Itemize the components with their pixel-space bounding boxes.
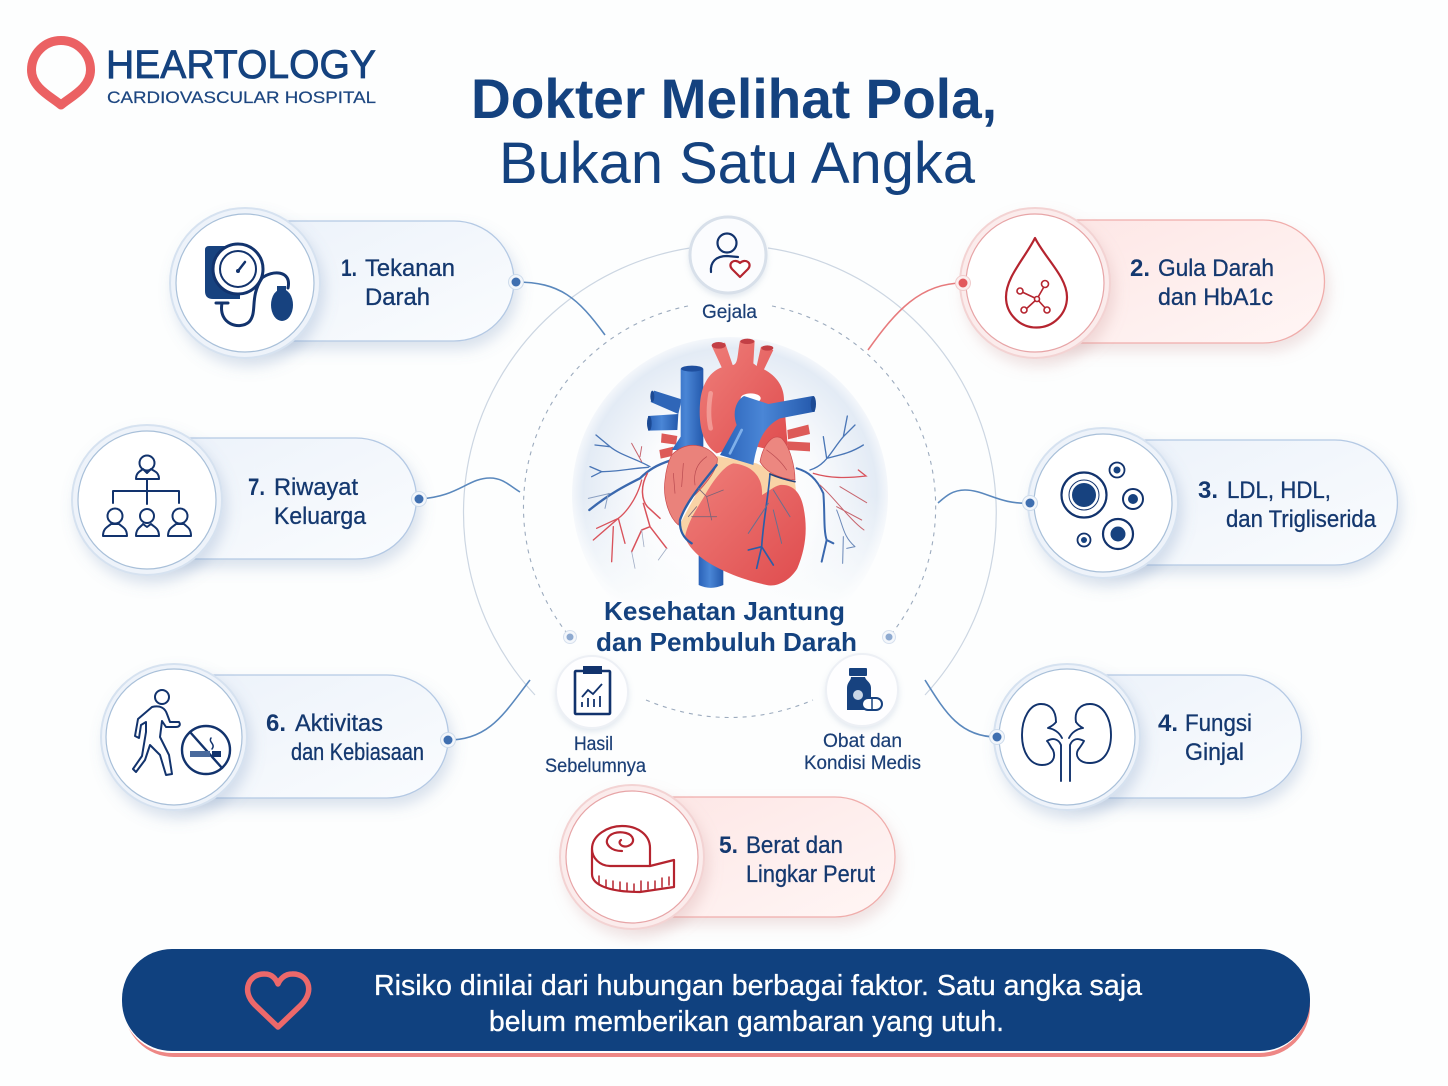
circle [72,425,222,575]
panel: 4 Fungsi Ginjal: Fungsi [1185,710,1252,737]
pulmonary stubs and side tubes [647,391,810,459]
panel: 6 Aktivitas dan Kebiasaan [101,664,456,810]
center heading: Kesehatan Jantung [604,596,845,626]
right atrium [664,445,717,525]
banner body [122,949,1310,1051]
panel: 1 Tekanan Darah [170,208,524,358]
connector dot [412,492,426,506]
panel: 7 Riwayat Keluarga: Keluarga [274,503,367,530]
node: Gejala [690,217,766,323]
node: Obat dan Kondisi Medis [804,654,921,774]
node: Hasil Sebelumnya: Sebelumnya [545,756,646,777]
panel: 7 Riwayat Keluarga [72,425,426,575]
icon: cholesterol particles [1062,462,1143,549]
circle [960,208,1110,358]
icon: person with heart [711,234,750,277]
panel: 2 Gula Darah dan HbA1c: Gula Darah [1158,255,1274,282]
pill [175,675,448,798]
vena cava [672,369,703,450]
outer ring arcs [464,248,996,695]
panel: 6 Aktivitas dan Kebiasaan: Aktivitas [295,710,383,737]
label: 7. [248,474,265,501]
node: Obat dan Kondisi Medis: Kondisi Medis [804,753,921,774]
label: 3. [1198,477,1218,504]
connector dot [440,732,456,748]
icon: walking and no smoking [133,690,230,775]
heart illustration [588,339,867,588]
circle [170,208,320,358]
heart glow background [570,335,890,655]
coronary vessels [673,450,795,568]
connectors [419,282,1030,740]
label: 2. [1130,255,1150,282]
circle [101,664,247,810]
title [471,67,997,196]
node circle [690,217,766,293]
aorta [700,339,788,454]
inferior vena cava [699,550,723,588]
pill [245,221,514,341]
panel: 3 LDL, HDL, dan Trigliserida [1022,428,1397,578]
node circle [826,654,898,726]
icon: logo ring [32,40,90,105]
icon: clipboard chart [575,667,610,714]
panel: 2 Gula Darah dan HbA1c [956,208,1324,358]
circle [994,664,1140,810]
banner text: Risiko dinilai dari hubungan berbagai faktor. Satu angka saja [374,970,1143,1002]
label: 1. [341,255,357,282]
icon: heart outline [248,974,309,1027]
node circle [556,656,628,728]
logo subtitle: CARDIOVASCULAR HOSPITAL [107,88,376,107]
connector dot [1022,496,1038,510]
connector dot [508,274,524,290]
center heading [596,596,857,657]
pill [147,438,416,559]
connector dot [956,276,970,290]
ventricle [685,463,806,585]
panel: 5 Berat dan Lingkar Perut: Lingkar Perut [746,861,875,888]
label: 6. [266,710,286,737]
ventricle base [679,456,800,563]
center heading: dan Pembuluh Darah [596,627,857,657]
pulmonary artery [720,396,815,465]
title: Dokter Melihat Pola, [471,67,997,130]
panel: 3 LDL, HDL, dan Trigliserida: dan Trigliserida [1226,506,1377,533]
logo name: HEARTOLOGY [106,43,376,87]
icon: kidneys [1022,704,1111,781]
callout banner [122,949,1310,1057]
title: Bukan Satu Angka [499,131,976,196]
panel: 2 Gula Darah dan HbA1c: dan HbA1c [1158,284,1273,311]
panel: 1 Tekanan Darah: Darah [365,284,430,311]
pill [1035,220,1324,343]
pill [1103,440,1397,565]
icon: medicine bottle [847,668,882,710]
icon: blood drop molecule [1006,238,1067,327]
panel: 5 Berat dan Lingkar Perut: Berat dan [746,832,843,859]
label: Gejala [702,302,757,323]
panel: 5 Berat dan Lingkar Perut [560,785,895,929]
pill [1067,675,1301,798]
panel: 4 Fungsi Ginjal: Ginjal [1185,739,1244,766]
panel: 3 LDL, HDL, dan Trigliserida: LDL, HDL, [1227,477,1331,504]
label: Hasil [574,734,613,755]
panel: 4 Fungsi Ginjal [990,664,1301,810]
callout banner: belum memberikan gambaran yang utuh. [489,1006,1004,1038]
label: 4. [1158,710,1178,737]
circle [1028,428,1178,578]
node: Hasil Sebelumnya [545,656,646,777]
lung vessels [588,416,867,568]
panel: 6 Aktivitas dan Kebiasaan: dan Kebiasaan [291,739,424,766]
panel: 7 Riwayat Keluarga: Riwayat [274,474,358,501]
panel: 1 Tekanan Darah: Tekanan [365,255,455,282]
icon: family tree [103,456,191,536]
circle [560,785,704,929]
banner shadow edge [124,952,1310,1057]
left atrium [760,437,795,480]
ring dots [564,630,896,644]
pill [632,797,895,917]
label: Obat dan [823,731,902,752]
dashed inner ring [523,306,936,718]
logo [32,40,376,107]
label: 5. [719,832,738,859]
connector dot [990,730,1004,744]
icon: measuring tape [592,826,674,892]
icon: blood pressure monitor [205,244,293,326]
